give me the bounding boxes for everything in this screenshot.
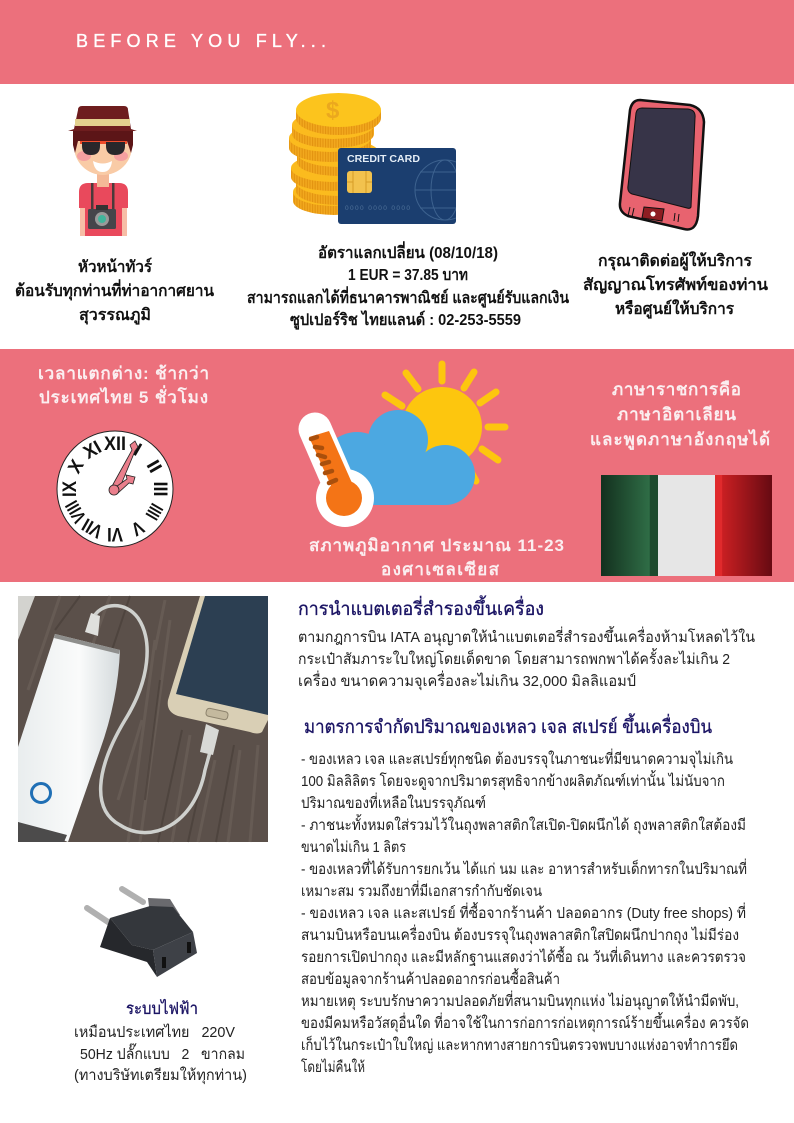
- icon: roman numeral clock: VI: [107, 523, 123, 544]
- tour leader text: หัวหน้าทัวร์: [78, 257, 152, 276]
- icon: mobile phone: [620, 100, 704, 229]
- icon: roman numeral clock: X: [64, 456, 89, 477]
- tour leader text: ต้อนรับทุกท่านที่ท่าอากาศยาน: [15, 279, 214, 301]
- panel: power bank rules: [298, 595, 755, 691]
- power bank text: เครื่อง ขนาดความจุเครื่องละไม่เกิน 32,000 มิลลิแอมป์: [298, 670, 636, 691]
- time difference text: เวลาแตกต่าง: ช้ากว่า: [38, 364, 209, 383]
- power bank text: ตามกฎการบิน IATA อนุญาตให้นำแบตเตอรี่สำรองขึ้นเครื่องห้ามโหลดไว้ใน: [298, 626, 755, 647]
- photo: power bank charging a phone: [18, 596, 268, 842]
- phone service text: หรือศูนย์ให้บริการ: [615, 299, 734, 320]
- liquid rules text: 100 มิลลิลิตร โดยจะดูจากปริมาตรสุทธิจากข้างผลิตภัณฑ์เท่านั้น ไม่นับจาก: [301, 770, 725, 791]
- icon: roman numeral clock: XII: [104, 434, 126, 455]
- icon: roman numeral clock: IX: [60, 481, 81, 497]
- photo: travel plug adapter: [87, 889, 197, 977]
- exchange rate text: 1 EUR = 37.85 บาท: [348, 267, 468, 284]
- liquid rules text: ขนาดไม่เกิน 1 ลิตร: [301, 838, 406, 856]
- liquid rules text: หมายเหตุ ระบบรักษาความปลอดภัยที่สนามบินทุกแห่ง ไม่อนุญาตให้นำมีดพับ,: [301, 990, 739, 1011]
- weather text: [309, 536, 564, 579]
- power system text: [74, 999, 247, 1085]
- panel: weather: [309, 364, 564, 579]
- icon: roman numeral clock: III: [149, 482, 170, 496]
- icon: roman numeral clock: VII: [79, 513, 107, 542]
- power system text: (ทางบริษัทเตรียมให้ทุกท่าน): [74, 1066, 247, 1085]
- panel: time difference: [38, 364, 209, 547]
- time difference text: [38, 364, 209, 407]
- weather text: องศาเซลเซียส: [381, 559, 500, 579]
- header band: [0, 0, 794, 84]
- phone service text: [583, 251, 768, 320]
- liquid rules text: ปริมาณของที่เหลือในบรรจุภัณฑ์: [301, 792, 486, 813]
- weather text: สภาพภูมิอากาศ ประมาณ 11-23: [309, 536, 564, 557]
- language text: ภาษาราชการคือ: [612, 379, 741, 399]
- icon: roman numeral clock: [57, 431, 173, 547]
- power bank text: [298, 626, 755, 691]
- liquid rules text: - ของเหลว เจล และสเปรย์ ที่ซื้อจากร้านค้า ปลอดอากร (Duty free shops) ที่: [301, 902, 746, 922]
- liquid rules text: โดยไม่คืนให้: [301, 1058, 365, 1076]
- icon: coin stack: $: [326, 97, 340, 124]
- icon: italian flag: [601, 475, 772, 576]
- liquid rules text: เหมาะสม รวมถึงยาที่มีเอกสารกำกับชัดเจน: [301, 880, 542, 900]
- icon: roman numeral clock: II: [142, 457, 165, 477]
- liquid rules text: สนามบินหรือบนเครื่องบิน ต้องบรรจุในถุงพลาสติกใสปิดผนึกปากถุง ไม่มีร่อง: [301, 924, 739, 945]
- phone service text: สัญญาณโทรศัพท์ของท่าน: [583, 274, 768, 295]
- power bank text: กระเป๋าสัมภาระใบใหญ่โดยเด็ดขาด โดยสามารถพกพาได้ครั้งละไม่เกิน 2: [298, 648, 730, 668]
- liquid rules text: สอบข้อมูลจากร้านค้าปลอดอากรก่อนซื้อสินค้า: [301, 968, 560, 988]
- liquid rules text: - ของเหลว เจล และสเปรย์ทุกชนิด ต้องบรรจุในภาชนะที่มีขนาดความจุไม่เกิน: [301, 748, 733, 769]
- title: BEFORE YOU FLY...: [76, 31, 326, 51]
- panel: tour leader: [15, 106, 214, 326]
- tour leader text: สุวรรณภูมิ: [79, 306, 151, 326]
- icon: credit card: [338, 148, 456, 224]
- panel: currency exchange: [247, 93, 569, 331]
- liquid rules text: เก็บไว้ในกระเป๋าใบใหญ่ และหากทางสายการบินตรวจพบบางแห่งอาจทำการยึด: [301, 1035, 738, 1054]
- liquid rules text: [301, 748, 749, 1076]
- icon: roman numeral clock: IIII: [141, 500, 166, 523]
- liquid rules text: - ภาชนะทั้งหมดใส่รวมไว้ในถุงพลาสติกใสเปิด-ปิดผนึกได้ ถุงพลาสติกใสต้องมี: [301, 814, 746, 835]
- liquid rules text: - ของเหลวที่ได้รับการยกเว้น ได้แก่ นม และ อาหารสำหรับเด็กทารกในปริมาณที่: [301, 858, 747, 878]
- exchange rate text: สามารถแลกได้ที่ธนาคารพาณิชย์ และศูนย์รับแลกเงิน: [247, 286, 569, 309]
- icon: sun cloud and thermometer: [309, 364, 505, 527]
- icon: tourist with camera: [68, 106, 137, 236]
- language text: ภาษาอิตาเลียน: [617, 404, 736, 424]
- language text: [590, 379, 770, 451]
- exchange rate text: อัตราแลกเปลี่ยน (08/10/18): [318, 241, 498, 262]
- power system text: เหมือนประเทศไทย 220V: [74, 1023, 235, 1041]
- phone service text: กรุณาติดต่อผู้ให้บริการ: [598, 251, 752, 272]
- power system text: ระบบไฟฟ้า: [126, 999, 198, 1018]
- icon: coin stack: [289, 93, 381, 215]
- time difference text: ประเทศไทย 5 ชั่วโมง: [39, 385, 208, 407]
- exchange rate text: [247, 241, 569, 331]
- heading: liquids: มาตรการจำกัดปริมาณของเหลว เจล สเปรย์ ขึ้นเครื่องบิน: [304, 713, 712, 737]
- icon: credit card: 0000 0000 0000: [345, 205, 410, 212]
- panel: liquid restrictions: [301, 713, 749, 1076]
- language text: และพูดภาษาอังกฤษได้: [590, 429, 770, 451]
- icon: credit card: CREDIT CARD: [347, 153, 420, 165]
- icon: roman numeral clock: VIII: [62, 496, 91, 526]
- liquid rules text: รอยการเปิดปากถุง และมีหลักฐานแสดงว่าได้ซื้อ ณ วันที่เดินทาง และควรตรวจ: [301, 946, 746, 967]
- info band: [0, 349, 794, 582]
- power system text: 50Hz ปลั๊กแบบ 2 ขากลม: [80, 1043, 245, 1063]
- icon: roman numeral clock: XI: [80, 437, 105, 464]
- panel: phone service: [583, 100, 768, 320]
- icon: roman numeral clock: I: [130, 440, 145, 461]
- tour leader text: [15, 257, 214, 326]
- icon: roman numeral clock: V: [127, 516, 147, 540]
- panel: language: [590, 379, 772, 576]
- heading: power bank: การนำแบตเตอรี่สำรองขึ้นเครื่อง: [298, 595, 544, 619]
- exchange rate text: ซูปเปอร์ริช ไทยแลนด์ : 02-253-5559: [290, 310, 521, 331]
